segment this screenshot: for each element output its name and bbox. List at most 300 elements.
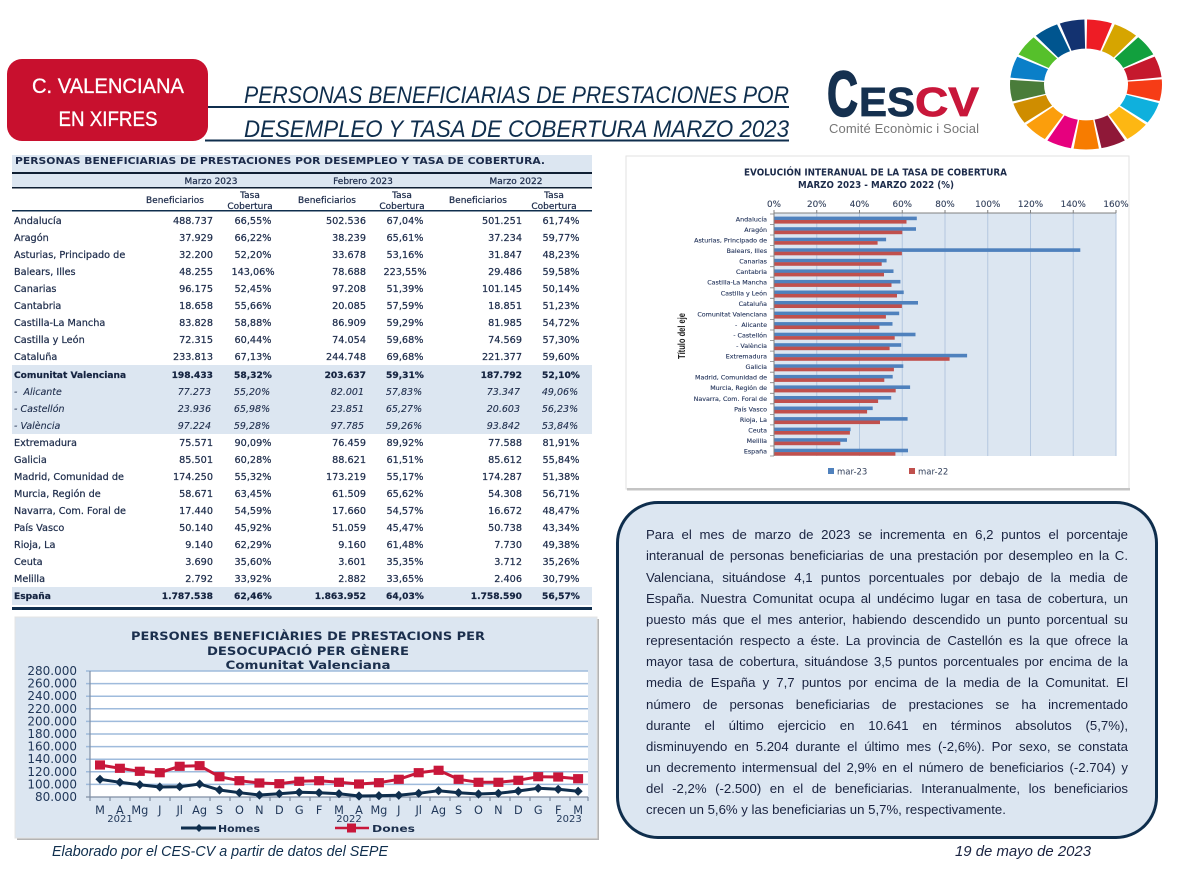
category labels: - Castellón [733, 332, 767, 340]
table rows: 83.828 [179, 318, 213, 329]
table rows: 9.140 [185, 540, 213, 551]
bar chart top axis labels: 20% [807, 200, 827, 210]
table rows: Aragón [14, 232, 49, 244]
x axis labels [95, 804, 583, 817]
table rows: 37.234 [488, 233, 522, 244]
table rows: 1.758.590 [471, 592, 522, 602]
bar chart legend [828, 468, 948, 478]
title: PERSONAS BENEFICIARIAS DE PRESTACIONES POR [244, 82, 789, 109]
text panel: commentary: representación respecto a éste. La provincia de Castellón es la que ofrece la [646, 633, 1128, 648]
table rows: 65,62% [387, 489, 423, 500]
text panel: commentary: Para el mes de marzo de 2023 se incrementa en 6,2 puntos el porcentaje [646, 527, 1128, 542]
year labels: 2022 [336, 814, 362, 825]
table rows: Castilla-La Mancha [14, 318, 105, 329]
x axis labels: D [275, 804, 284, 817]
table rows: 48.255 [179, 267, 213, 278]
table rows: 31.847 [488, 250, 522, 261]
category labels: Canarias [739, 259, 767, 266]
table rows: 203.637 [325, 371, 366, 381]
text panel: commentary: mayor tasa de cobertura, situándose 3,5 puntos porcentuales por encima de la [646, 654, 1128, 669]
category labels: - Alicante [735, 322, 767, 329]
table rows [14, 215, 580, 602]
table rows: 45,92% [235, 523, 271, 534]
year labels: 2023 [556, 814, 582, 825]
table rows: 48,47% [543, 506, 579, 517]
table rows: 198.433 [172, 371, 213, 381]
category labels [694, 215, 767, 456]
table rows: Extremadura [14, 438, 77, 449]
x axis labels: S [216, 804, 223, 817]
table rows: 45,47% [387, 523, 423, 534]
table rows: 74.054 [332, 335, 366, 346]
x axis labels: M [573, 804, 583, 817]
bar chart top axis labels: 80% [935, 200, 955, 210]
bar chart top axis labels: 0% [767, 200, 781, 210]
table column headers: Beneficiarios [449, 196, 507, 206]
table rows: 86.909 [332, 318, 366, 329]
table rows: España [14, 592, 51, 602]
table rows: Madrid, Comunidad de [14, 472, 124, 483]
bars: mar-23 [774, 217, 1080, 452]
table rows: 54,72% [543, 318, 579, 329]
text panel: commentary: número de personas beneficiarias de prestaciones se ha incrementado [646, 697, 1128, 712]
line chart title [131, 628, 485, 672]
table rows: 51,23% [543, 301, 579, 312]
y axis labels: 120.000 [27, 765, 77, 779]
y axis labels: 260.000 [27, 677, 77, 691]
table rows: 187.792 [481, 371, 522, 381]
category labels: Madrid, Comunidad de [695, 375, 767, 382]
text panel: commentary: interanual de personas beneficiarias de una prestación por desempleo en la C. [646, 548, 1128, 563]
x axis labels: Mg [131, 804, 148, 817]
bars: mar-22 [774, 220, 950, 456]
table rows: 59,60% [543, 352, 579, 363]
table rows: Balears, Illes [14, 267, 76, 278]
bar chart top axis labels: 60% [892, 200, 912, 210]
table rows: 76.459 [332, 438, 366, 449]
x axis labels: N [494, 804, 503, 817]
table rows: 65,61% [387, 233, 423, 244]
table column headers: Beneficiarios [298, 196, 356, 206]
header rules [205, 106, 789, 142]
table rows: 65,27% [386, 404, 422, 415]
table rows: 61.509 [332, 489, 366, 500]
category labels: Andalucía [736, 215, 767, 223]
table rows: 1.787.538 [162, 592, 213, 602]
table rows: 233.813 [173, 352, 213, 363]
table rows: 93.842 [487, 421, 520, 432]
category labels: Balears, Illes [727, 248, 767, 255]
table column headers [146, 177, 577, 212]
table rows: 7.730 [494, 540, 522, 551]
table rows: 59,77% [543, 233, 579, 244]
table rows: País Vasco [14, 522, 64, 534]
table rows: Navarra, Com. Foral de [14, 506, 126, 517]
table rows: 55,17% [387, 472, 423, 483]
table rows: 59,29% [387, 318, 423, 329]
table rows: 23.851 [331, 404, 364, 415]
text panel: commentary: España. Nuestra Comunitat ocupa al undécimo lugar en tasa de cobertura, un [646, 591, 1128, 606]
x axis labels: G [534, 804, 543, 817]
title: DESEMPLEO Y TASA DE COBERTURA MARZO 2023 [244, 116, 790, 143]
x axis labels: O [235, 804, 244, 817]
line chart legend: Homes [218, 824, 260, 835]
table rows: 37.929 [179, 233, 213, 244]
icon: SDG colour wheel [1003, 13, 1169, 156]
table rows: 54.308 [488, 489, 522, 500]
table rows: 52,20% [235, 250, 271, 261]
table rows: Andalucía [14, 215, 62, 227]
text panel: commentary: del -2,2% (-2.500) en el de beneficiarias. Interanualmente, los beneficiarios [646, 781, 1128, 796]
footer: source: Elaborado por el CES-CV a partir de datos del SEPE [52, 843, 389, 860]
table rows: 56,23% [542, 404, 578, 415]
table rows: 78.688 [332, 267, 366, 278]
bar chart title: MARZO 2023 - MARZO 2022 (%) [798, 180, 954, 191]
table rows: 221.377 [482, 352, 522, 363]
table rows: 18.851 [488, 301, 522, 312]
table rows: 48,23% [543, 250, 579, 261]
table rows: Canarias [14, 284, 56, 295]
bar chart top axis labels [767, 200, 1129, 210]
table rows: 62,29% [235, 540, 271, 551]
logo: CES CV [827, 58, 980, 136]
table column headers: Tasa [239, 191, 260, 201]
table rows: 18.658 [179, 301, 213, 312]
table rows: 143,06% [231, 267, 275, 278]
line chart title: PERSONES BENEFICIÀRIES DE PRESTACIONS PER [131, 628, 485, 643]
table rows: 55,20% [234, 387, 270, 398]
logo: CES CV: ES [859, 79, 915, 125]
table rows: 88.621 [332, 455, 366, 466]
table rows: 16.672 [488, 506, 522, 517]
bar chart top axis labels: 140% [1061, 200, 1086, 210]
table rows: Ceuta [14, 557, 43, 568]
x axis labels: A [355, 804, 363, 817]
table column headers: Marzo 2023 [185, 177, 237, 187]
y axis labels: 160.000 [27, 740, 77, 754]
table rows: 50,14% [543, 284, 579, 295]
category labels: Castilla-La Mancha [707, 280, 767, 287]
logo: CES CV: Comité Econòmic i Social [829, 121, 979, 136]
x axis labels: O [474, 804, 483, 817]
y axis labels [27, 664, 77, 804]
table rows: 58.671 [179, 489, 213, 500]
table rows: 33,92% [235, 574, 271, 585]
table rows: 67,04% [387, 216, 423, 227]
table rows: 30,79% [543, 574, 579, 585]
category labels: Ceuta [748, 427, 767, 434]
table rows: 69,68% [387, 352, 423, 363]
table rows: 3.712 [494, 557, 522, 568]
table rows: 2.882 [338, 574, 366, 585]
table rows: 502.536 [326, 216, 366, 227]
table rows: 61,48% [387, 540, 423, 551]
x axis labels: Mg [370, 804, 387, 817]
table rows: 59,28% [234, 421, 270, 432]
table rows: 488.737 [173, 216, 213, 227]
table rows: 53,16% [387, 250, 423, 261]
table rows: 55,66% [235, 301, 271, 312]
table rows: 174.250 [173, 472, 213, 483]
table rows: Asturias, Principado de [14, 250, 125, 261]
table rows: 63,45% [235, 489, 271, 500]
line chart legend [181, 824, 415, 835]
table rows: 73.347 [487, 387, 520, 398]
table rows: 101.145 [482, 284, 522, 295]
table rows: 501.251 [482, 216, 522, 227]
table rows: 74.569 [488, 335, 522, 346]
table rows: 59,68% [387, 335, 423, 346]
table rows: 52,45% [235, 284, 271, 295]
table column headers: Febrero 2023 [333, 177, 393, 187]
y axis labels: 140.000 [27, 752, 77, 766]
table rows: 33.678 [332, 250, 366, 261]
table rows: 43,34% [543, 523, 579, 534]
table rows: 3.601 [338, 557, 366, 568]
table rows: 96.175 [179, 284, 213, 295]
table rows: 75.571 [179, 438, 213, 449]
table rows: - València [14, 421, 61, 432]
text panel: commentary: crecen un 5,6% y las beneficiarias un 5,7%, respectivamente. [646, 802, 1006, 817]
y axis labels: 100.000 [27, 777, 77, 791]
table rows: 58,88% [235, 318, 271, 329]
table column headers: Cobertura [379, 202, 425, 212]
table rows: Castilla y León [14, 334, 85, 346]
series: Dones [100, 765, 578, 784]
axis title: Título del eje [676, 313, 688, 359]
table rows: 53,84% [542, 421, 578, 432]
table rows: Rioja, La [14, 540, 56, 551]
table rows: 60,44% [235, 335, 271, 346]
table rows: 90,09% [235, 438, 271, 449]
bar chart top axis labels: 100% [975, 200, 1000, 210]
x axis labels: M [95, 804, 105, 817]
table rows: 85.501 [179, 455, 213, 466]
table rows: 59,26% [386, 421, 422, 432]
table rows: 3.690 [185, 557, 213, 568]
y axis labels: 200.000 [27, 714, 77, 728]
category labels: Aragón [744, 226, 767, 234]
table rows: 59,58% [543, 267, 579, 278]
panel: data table [12, 155, 592, 610]
table rows: 1.863.952 [315, 592, 366, 602]
table rows: 54,59% [235, 506, 271, 517]
text panel: commentary: disminuyendo en 5.204 durante el último mes (-2,6%). Por sexo, se constata [646, 739, 1128, 754]
table rows: 2.792 [185, 574, 213, 585]
bar chart top axis labels: 120% [1018, 200, 1043, 210]
table rows: 77.588 [488, 438, 522, 449]
category labels: - València [736, 342, 767, 350]
table rows: Cantabria [14, 301, 61, 312]
table column headers: Tasa [391, 191, 412, 201]
panel: bar chart coverage rate [626, 156, 1130, 490]
text panel: commentary: durante el último ejercicio en 10.641 en términos absolutos (5,7%), [646, 718, 1128, 733]
category labels: Asturias, Principado de [694, 238, 767, 244]
category labels: Rioja, La [740, 417, 767, 424]
table rows: 35,26% [543, 557, 579, 568]
table column headers: Cobertura [531, 202, 577, 212]
badge: C. Valenciana en xifres: C. VALENCIANA [32, 75, 184, 98]
panel: line chart by gender [15, 617, 599, 840]
category labels: Castilla y León [721, 289, 767, 297]
badge: C. Valenciana en xifres: EN XIFRES [58, 108, 158, 131]
line chart legend: Dones [372, 824, 415, 835]
table column headers: Marzo 2022 [490, 177, 542, 187]
x axis labels: G [295, 804, 304, 817]
table rows: 97.208 [332, 284, 366, 295]
table rows: 57,30% [543, 335, 579, 346]
footer: date: 19 de mayo de 2023 [955, 843, 1092, 860]
table rows: 20.085 [332, 301, 366, 312]
y axis labels: 240.000 [27, 689, 77, 703]
year labels [107, 814, 582, 825]
table rows: 32.200 [179, 250, 213, 261]
badge: C. Valenciana en xifres [7, 59, 208, 141]
table rows: 61,51% [387, 455, 423, 466]
bar chart top axis labels: 40% [850, 200, 869, 210]
table rows: 174.287 [482, 472, 522, 483]
table rows: 54,57% [387, 506, 423, 517]
table rows: 59,31% [386, 371, 424, 381]
y axis labels: 280.000 [27, 664, 77, 678]
table rows: Murcia, Región de [14, 488, 101, 500]
table rows: 49,38% [543, 540, 579, 551]
x axis labels: Ag [192, 804, 207, 817]
table rows: 57,83% [386, 387, 422, 398]
x axis labels: F [555, 804, 561, 817]
table rows: 52,10% [542, 371, 580, 381]
table column headers: Cobertura [227, 202, 273, 212]
table rows: 38.239 [332, 233, 366, 244]
table rows: 23.936 [178, 404, 211, 415]
table rows: 20.603 [487, 404, 520, 415]
category labels: País Vasco [734, 405, 767, 413]
table rows: 66,55% [235, 216, 271, 227]
line chart title: DESOCUPACIÓ PER GÈNERE [207, 643, 409, 658]
category labels: Galicia [746, 364, 767, 371]
table rows: 56,71% [543, 489, 579, 500]
bar chart legend: mar-22 [918, 468, 948, 478]
table rows: - Castellón [14, 404, 65, 415]
table rows: 65,98% [234, 404, 270, 415]
y axis labels: 220.000 [27, 702, 77, 716]
table rows: 97.224 [178, 421, 211, 432]
category labels: Comunitat Valenciana [697, 311, 767, 318]
table rows: 81,91% [543, 438, 579, 449]
series: Homes [100, 779, 578, 796]
x axis labels: A [116, 804, 124, 817]
table rows: 173.219 [326, 472, 366, 483]
category labels: Melilla [747, 438, 767, 445]
table rows: Galicia [14, 455, 47, 466]
table rows: 35,35% [387, 557, 423, 568]
x axis labels: M [334, 804, 344, 817]
table rows: 51,38% [543, 472, 579, 483]
table rows: 77.273 [178, 387, 211, 398]
category labels: España [744, 448, 767, 456]
table rows: 2.406 [494, 574, 522, 585]
table rows: 223,55% [383, 267, 427, 278]
x axis labels: S [455, 804, 462, 817]
table rows: 56,57% [542, 592, 580, 602]
x axis labels: N [255, 804, 264, 817]
x axis labels: F [316, 804, 322, 817]
line chart title: Comunitat Valenciana [226, 658, 390, 672]
bar chart legend: mar-23 [837, 468, 867, 478]
category labels: Navarra, Com. Foral de [694, 396, 767, 403]
table rows: Cataluña [14, 352, 57, 363]
table rows: Comunitat Valenciana [14, 371, 126, 381]
x axis labels: Jl [175, 804, 183, 817]
text panel: commentary: puesto más que el mes anterior, habiendo descendido un punto porcentual su [646, 612, 1128, 627]
table rows: 33,65% [387, 574, 423, 585]
text panel: commentary: media de España y 7,7 puntos por encima de la media de la Comunitat. El [646, 675, 1128, 690]
table rows: 29.486 [488, 267, 522, 278]
table rows: 51,39% [387, 284, 423, 295]
year labels: 2021 [107, 814, 133, 825]
table rows: 67,13% [235, 352, 271, 363]
table rows: 49,06% [542, 387, 578, 398]
table heading: PERSONAS BENEFICIARIAS DE PRESTACIONES POR DESEMPLEO Y TASA DE COBERTURA. [15, 156, 545, 167]
table rows: 9.160 [338, 540, 366, 551]
logo: CES CV: CV [915, 79, 980, 125]
y axis labels: 180.000 [27, 727, 77, 741]
table rows: 55,32% [235, 472, 271, 483]
category labels: Cataluña [739, 301, 767, 308]
table rows: 82.001 [331, 387, 364, 398]
table rows: 64,03% [386, 592, 424, 602]
text panel: commentary [616, 501, 1158, 839]
table rows: 62,46% [234, 592, 272, 602]
table rows: 72.315 [179, 335, 213, 346]
table rows: 17.660 [332, 506, 366, 517]
bar chart top axis labels: 160% [1103, 200, 1129, 210]
table rows: 81.985 [488, 318, 522, 329]
bar chart title: EVOLUCIÓN INTERANUAL DE LA TASA DE COBERTURA [744, 166, 1008, 178]
table rows: 89,92% [387, 438, 423, 449]
table column headers: Tasa [543, 191, 564, 201]
table rows: Melilla [14, 574, 45, 585]
text panel: commentary: un decremento intermensual del 2,9% en el número de beneficiarios (-2.704) y [646, 760, 1128, 775]
table rows: 61,74% [543, 216, 579, 227]
table rows: 50.140 [179, 523, 213, 534]
bar chart title [744, 166, 1008, 191]
table rows: 17.440 [179, 506, 213, 517]
table rows: 66,22% [235, 233, 271, 244]
table rows: 97.785 [331, 421, 364, 432]
table rows: 85.612 [488, 455, 522, 466]
text panel: commentary: Valenciana, situándose 4,1 puntos porcentuales por debajo de la media de [646, 570, 1128, 585]
x axis labels: J [157, 804, 161, 817]
y axis labels: 80.000 [35, 790, 77, 804]
table rows: 55,84% [543, 455, 579, 466]
x axis labels: Jl [414, 804, 422, 817]
logo: CES CV: C [827, 58, 858, 130]
table rows: 51.059 [332, 523, 366, 534]
table rows: - Alicante [14, 387, 62, 398]
category labels: Extremadura [726, 354, 767, 361]
x axis labels: D [514, 804, 523, 817]
table rows: 57,59% [387, 301, 423, 312]
category labels: Cantabria [736, 269, 767, 276]
table rows: 35,60% [235, 557, 271, 568]
x axis labels: Ag [431, 804, 446, 817]
x axis labels: J [396, 804, 400, 817]
table rows: 58,32% [234, 371, 272, 381]
table rows: 60,28% [235, 455, 271, 466]
table rows: 244.748 [326, 352, 366, 363]
table column headers: Beneficiarios [146, 196, 204, 206]
